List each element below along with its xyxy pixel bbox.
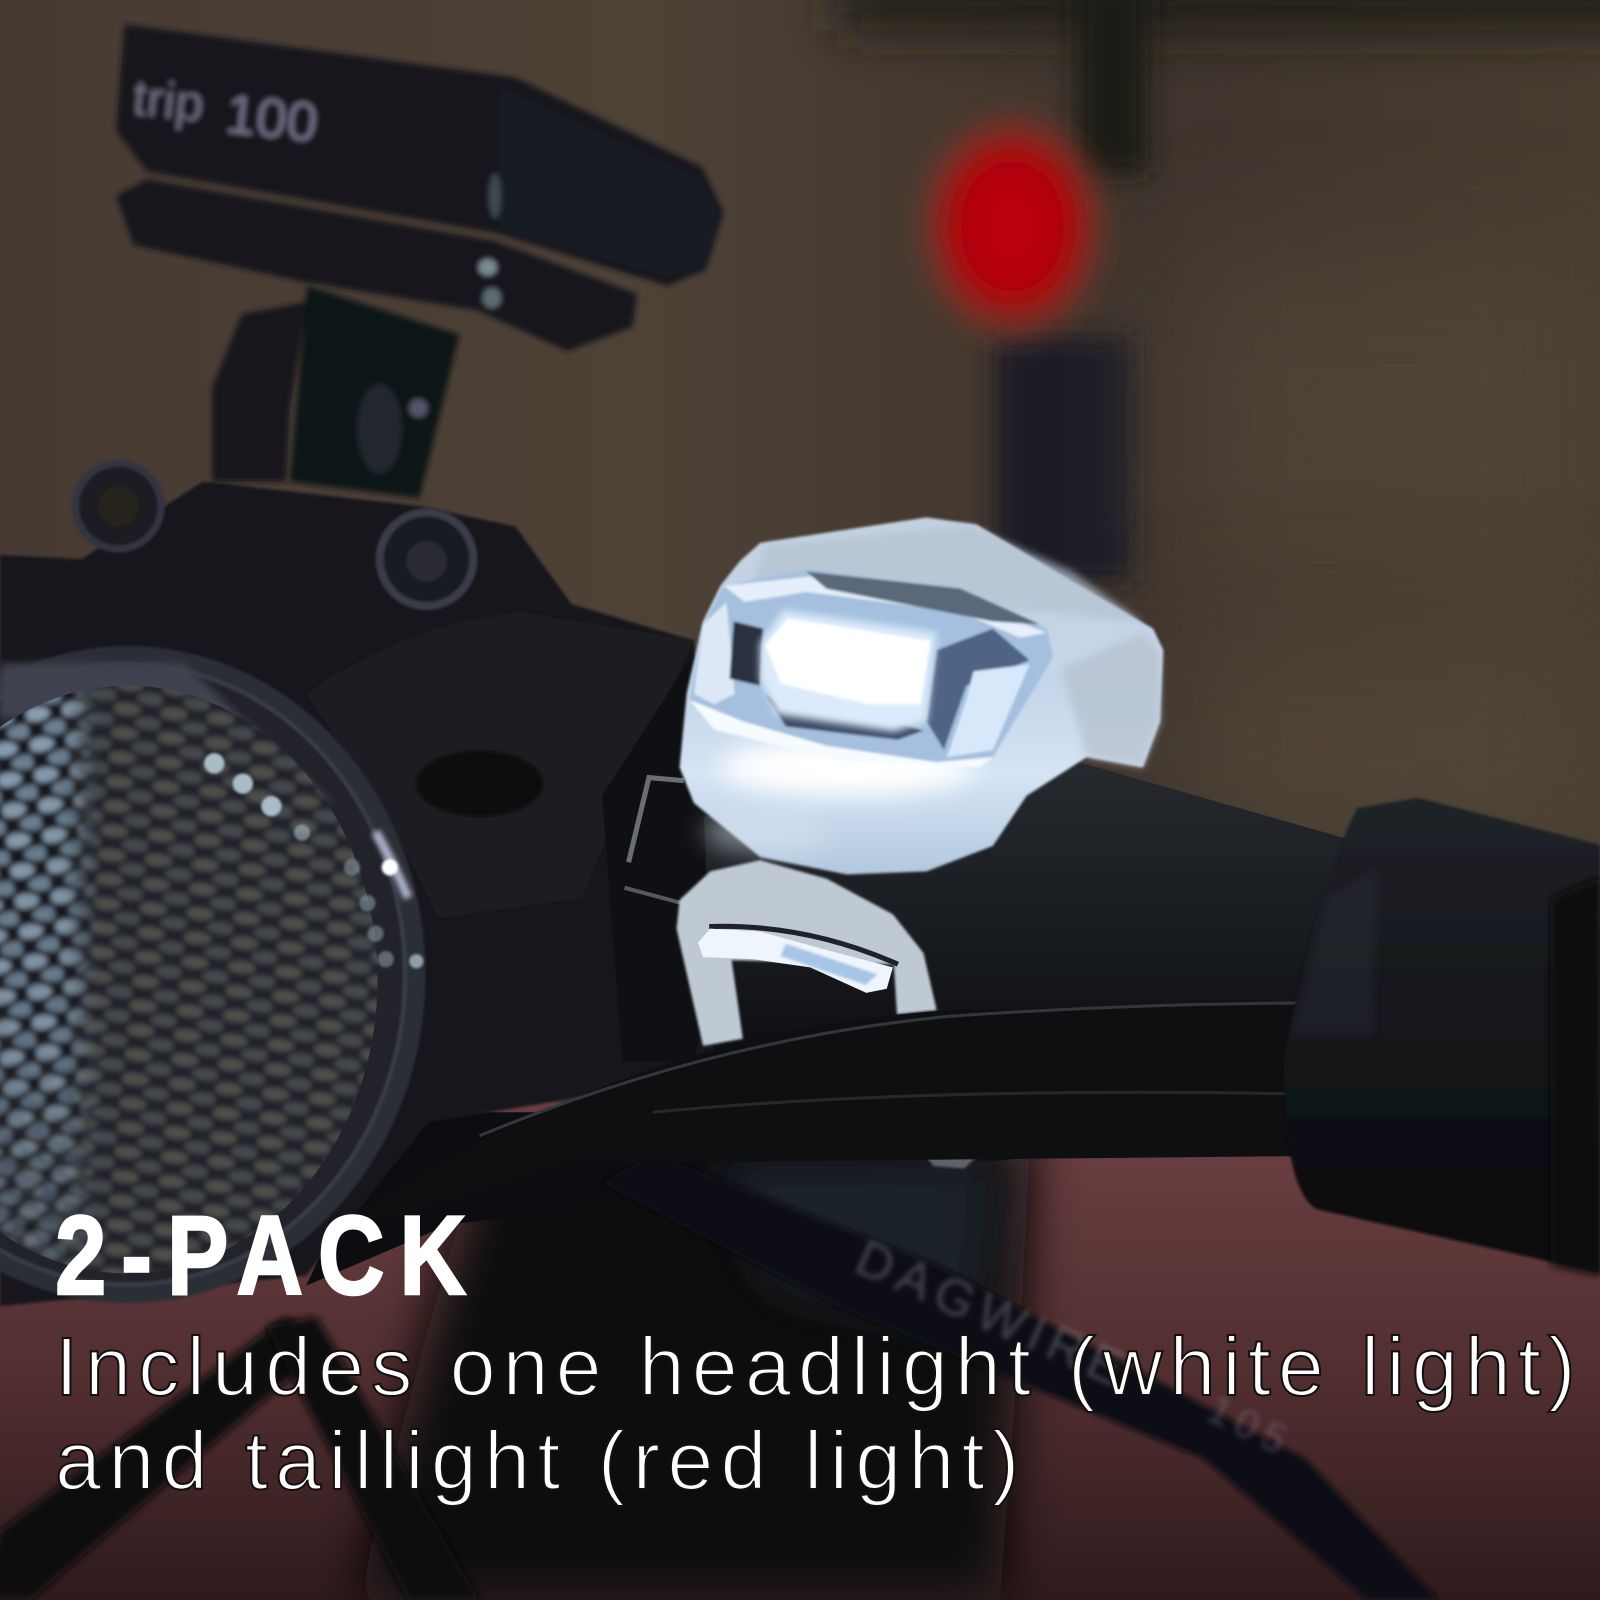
left dark strut [0,1316,327,1600]
lower dark frame area [0,1112,1041,1600]
lens dark patch [730,621,763,686]
caption body line 2: and taillight (red light) [55,1414,1019,1507]
pale strap tail under cables [913,1141,995,1168]
lens right facets [927,629,1030,750]
grip [1284,798,1600,1276]
lens glow below [719,739,974,796]
frame tube with blurred lettering: DAGWIRE [848,1228,1139,1400]
caption [55,1192,1576,1507]
reflector rim highlight [376,832,408,898]
round reflector [0,646,426,1316]
computer label [129,68,321,154]
computer label: trip [130,68,207,133]
silicone strap loop [677,860,937,1046]
white front light [680,517,1163,874]
computer label: 100 [223,82,321,154]
clear lens [690,569,1053,767]
caption body line 1: Includes one headlight (white light) [55,1320,1576,1413]
strap slot shadow [709,926,898,964]
frame tube with blurred lettering: 105 [1200,1385,1301,1466]
stem and handlebar clamp [0,482,1347,1306]
stem bolts [76,463,473,606]
bike computer [116,24,723,498]
caption heading: 2-PACK [55,1192,466,1318]
frame tube with blurred lettering [602,1153,1439,1600]
bright LED glow [760,610,937,732]
computer body [116,24,723,286]
brake cables [337,1003,1301,1224]
handlebar [704,757,1347,1061]
blurred red taillight [910,102,1114,351]
computer lower clip [116,180,637,351]
silicone body [680,517,1163,874]
strap lit slot [698,929,893,993]
computer mount stem [212,286,459,498]
reflector sparkles [204,753,423,968]
